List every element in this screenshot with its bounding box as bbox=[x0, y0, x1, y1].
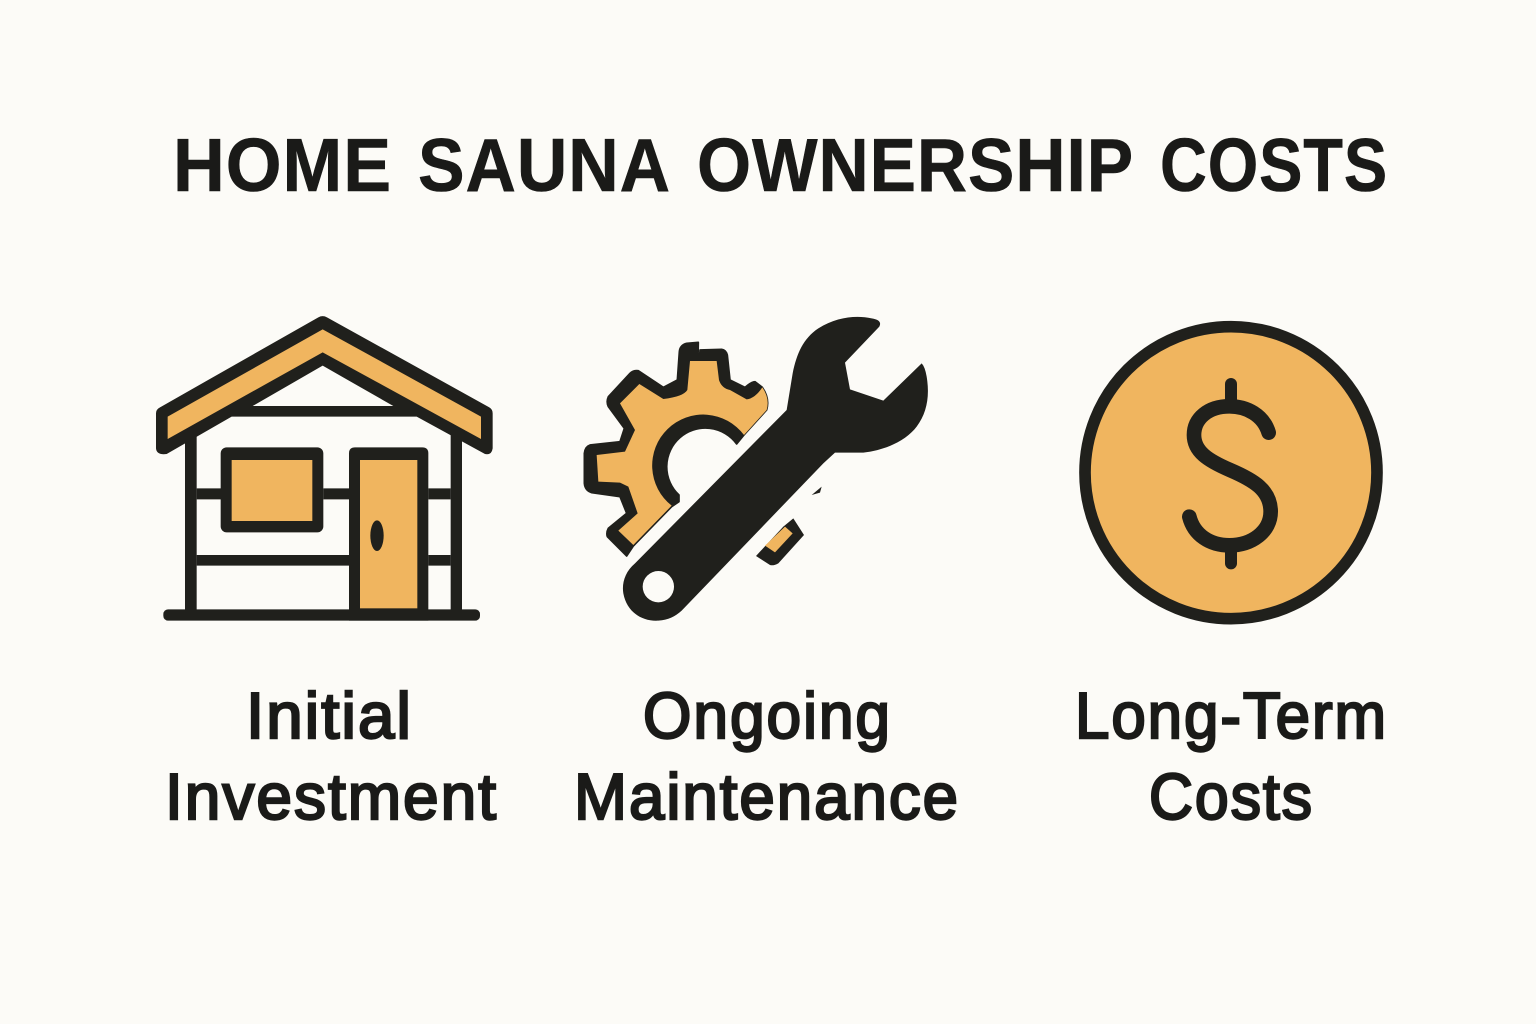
icon: gear and wrench bbox=[584, 317, 928, 621]
label: initial investment: Initial bbox=[246, 679, 413, 752]
gear outline bbox=[584, 342, 768, 556]
label: ongoing maintenance: Ongoing bbox=[643, 679, 892, 752]
planks bbox=[197, 488, 451, 566]
title bbox=[173, 123, 1388, 207]
icon: dollar coin bbox=[1085, 327, 1377, 619]
label: initial investment bbox=[165, 679, 498, 833]
gear fragment bbox=[756, 487, 822, 565]
label: ongoing maintenance bbox=[574, 679, 960, 833]
title: COSTS bbox=[1160, 123, 1388, 207]
door bbox=[349, 447, 428, 621]
gear fill bbox=[597, 361, 768, 545]
label: ongoing maintenance: Maintenance bbox=[574, 760, 960, 833]
window bbox=[221, 447, 323, 532]
roof bbox=[156, 316, 493, 454]
dollar sign bbox=[1189, 384, 1271, 563]
coin bbox=[1085, 327, 1377, 619]
label: initial investment: Investment bbox=[165, 760, 498, 833]
icon: house bbox=[156, 316, 493, 621]
label: long-term costs: Long-Term bbox=[1075, 679, 1388, 752]
floor line bbox=[163, 609, 480, 621]
title: SAUNA bbox=[418, 123, 671, 207]
title: HOME bbox=[173, 123, 392, 207]
title: OWNERSHIP bbox=[697, 123, 1134, 207]
label: long-term costs: Costs bbox=[1149, 760, 1314, 833]
label: long-term costs bbox=[1075, 679, 1388, 833]
wrench bbox=[623, 317, 928, 621]
walls bbox=[185, 433, 462, 610]
